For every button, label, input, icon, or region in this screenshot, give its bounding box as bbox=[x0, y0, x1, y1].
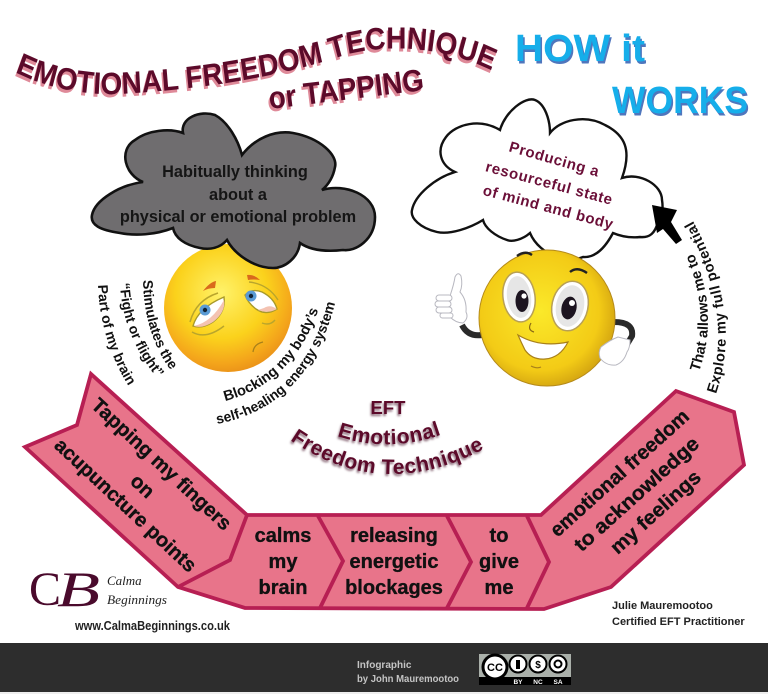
author credit bbox=[612, 600, 745, 628]
logo bbox=[29, 561, 167, 617]
cloud text bbox=[120, 163, 356, 226]
curved text: fight or flight: Part of my brain bbox=[98, 285, 134, 386]
icon: sad emoji bbox=[164, 244, 292, 372]
logo: Beginnings bbox=[107, 592, 167, 607]
title: EMOTIONAL FREEDOM TECHNIQUE bbox=[16, 27, 498, 94]
footer bar bbox=[0, 643, 768, 694]
ribbon text: releasing: blockages bbox=[345, 577, 443, 599]
icon: happy emoji bbox=[435, 250, 632, 386]
curved text: potential: That allows me to bbox=[688, 254, 708, 370]
cc badge: CC bbox=[487, 662, 503, 674]
ribbon text: to give me: give bbox=[479, 551, 519, 573]
cloud text: Producing a bbox=[507, 139, 601, 181]
author credit: Certified EFT Practitioner bbox=[612, 616, 745, 628]
cloud text: Habitually thinking bbox=[162, 163, 308, 181]
ribbon text: calms bbox=[255, 525, 311, 599]
ribbon text: tapping: acupuncture points bbox=[50, 434, 200, 577]
ribbon text: emotional freedom: emotional freedom bbox=[546, 406, 694, 542]
ribbon text: tapping bbox=[50, 394, 236, 577]
cloud text: resourceful state bbox=[484, 158, 615, 209]
cloud text: of mind and body bbox=[481, 182, 615, 233]
curved text: potential: Explore my full potential bbox=[684, 222, 728, 394]
heading: EFT: Emotional bbox=[338, 420, 440, 444]
heading: how it works: WORKS bbox=[614, 82, 750, 124]
ribbon text: calms: brain bbox=[259, 577, 307, 599]
cloud: resourceful thought bbox=[412, 99, 663, 261]
heading: how it works: WORKS bbox=[612, 80, 748, 122]
curved text: blocking energy: Blocking my body’s bbox=[223, 308, 318, 401]
cc badge: $ bbox=[535, 660, 541, 671]
cloud text: about a bbox=[209, 186, 268, 204]
heading: how it works bbox=[515, 28, 750, 124]
ribbon text: to give me bbox=[479, 525, 519, 599]
logo: C bbox=[29, 563, 61, 616]
ribbon text: to give me: to bbox=[490, 525, 508, 547]
ribbon text: tapping: on bbox=[126, 470, 159, 503]
ribbon text: releasing: releasing bbox=[350, 525, 438, 547]
heading: EFT: Freedom Technique bbox=[291, 428, 482, 474]
heading: EFT: Freedom Technique bbox=[289, 430, 483, 478]
ribbon text: tapping: Tapping my fingers bbox=[87, 394, 236, 535]
ribbon bbox=[25, 374, 744, 609]
ribbon text: emotional freedom: to acknowledge bbox=[570, 433, 704, 556]
cloud text bbox=[481, 139, 615, 233]
curved text: fight or flight bbox=[98, 280, 176, 386]
cc badge: SA bbox=[553, 679, 563, 686]
ribbon text: calms: my bbox=[269, 551, 298, 573]
title: or TAPPING bbox=[265, 65, 424, 119]
ribbon text: calms: calms bbox=[255, 525, 311, 547]
curved text: blocking energy: self-healing energy system bbox=[216, 302, 335, 424]
ribbon text: releasing bbox=[345, 525, 443, 599]
title: or TAPPING bbox=[267, 62, 426, 116]
icon: right glove bbox=[599, 337, 630, 365]
cloud text: physical or emotional problem bbox=[120, 208, 356, 226]
heading: how it works: HOW it bbox=[515, 28, 645, 70]
ribbon text: to give me: me bbox=[485, 577, 513, 599]
logo: Calma bbox=[107, 573, 142, 588]
author credit: Julie Mauremootoo bbox=[612, 600, 713, 612]
heading: EFT: Emotional bbox=[336, 422, 440, 448]
curved text: fight or flight: “Fight or flight” bbox=[120, 284, 164, 374]
heading: EFT: EFT bbox=[371, 397, 406, 418]
website: www.CalmaBeginnings.co.uk bbox=[74, 619, 231, 633]
heading: EFT bbox=[289, 397, 483, 478]
cc badge: NC bbox=[533, 679, 543, 686]
arrow bbox=[652, 205, 682, 244]
title: EMOTIONAL FREEDOM TECHNIQUE bbox=[15, 30, 496, 98]
footer text: Infographic bbox=[357, 660, 412, 671]
heading: how it works: HOW it bbox=[516, 30, 647, 72]
footer text: by John Mauremootoo bbox=[357, 674, 459, 685]
logo: B bbox=[57, 561, 100, 617]
cloud: dark thought bbox=[92, 114, 375, 268]
ribbon text: emotional freedom: my feelings bbox=[606, 466, 706, 559]
cc badge: BY bbox=[513, 679, 523, 686]
ribbon text: releasing: energetic bbox=[350, 551, 438, 573]
footer text bbox=[357, 660, 459, 685]
heading: EFT: EFT bbox=[370, 399, 405, 420]
curved text: fight or flight: Stimulates the bbox=[143, 280, 176, 369]
icon: thumbs-up glove bbox=[435, 274, 467, 323]
cc badge bbox=[479, 654, 571, 686]
